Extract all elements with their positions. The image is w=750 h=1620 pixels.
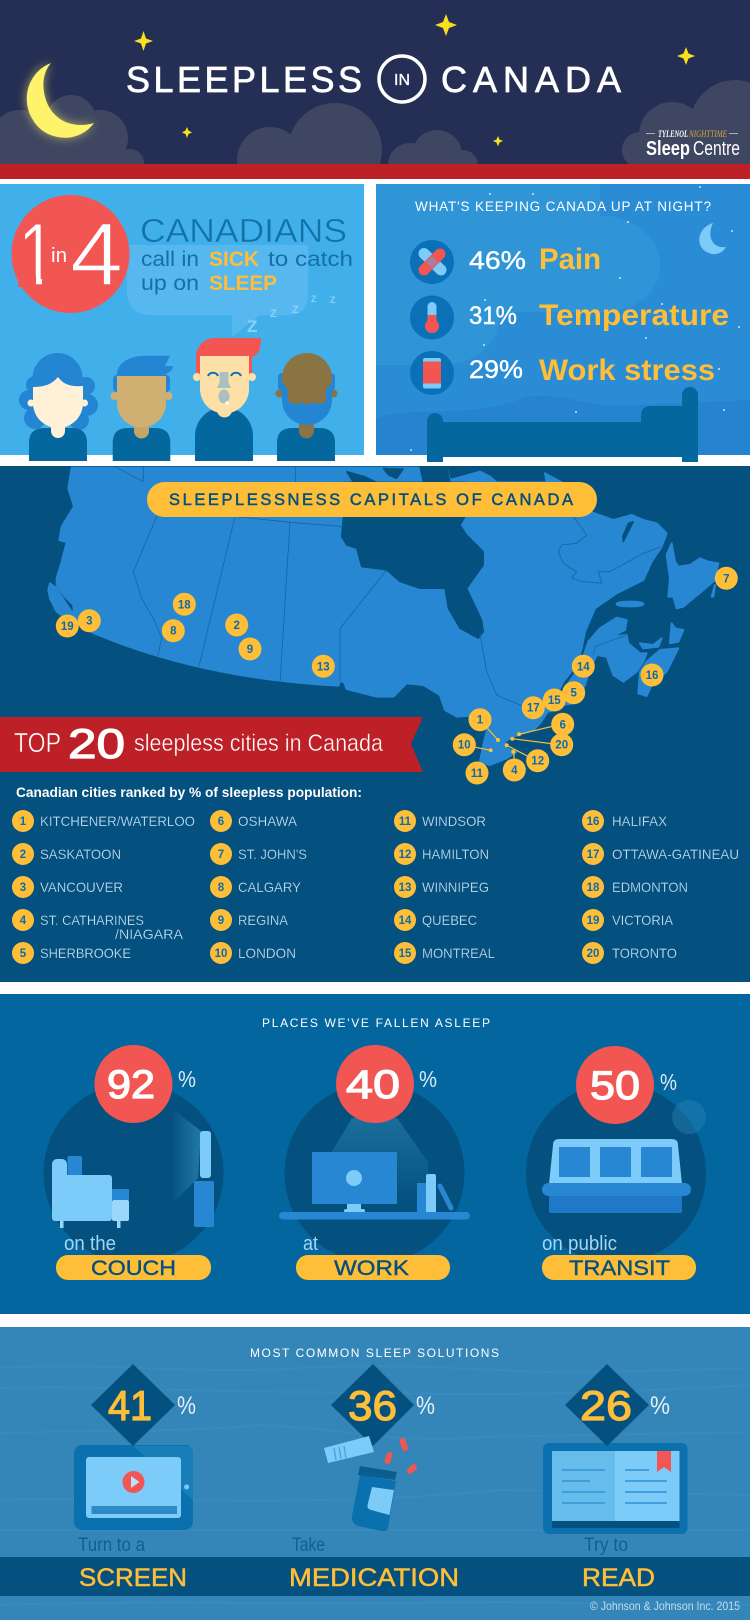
map marker numbers [61, 573, 730, 780]
ranking list numbers: 1 [20, 816, 27, 828]
panel: 1 in 4 Canadians [0, 184, 364, 461]
ranking list names: HALIFAX [612, 813, 668, 829]
map marker numbers: 12 [531, 756, 544, 768]
ranking list numbers: 19 [587, 915, 599, 927]
stat: temperature: Temperature [539, 299, 729, 332]
stat: pain: 46% [469, 247, 526, 275]
title [126, 56, 621, 102]
map marker numbers: 1 [477, 715, 484, 727]
map marker numbers: 2 [233, 620, 240, 632]
ranking list names: WINDSOR [422, 813, 486, 829]
solution: screen [74, 1364, 196, 1556]
ranking list names: /NIAGARA [115, 926, 184, 942]
solutions band [0, 1557, 750, 1596]
solutions band: READ [582, 1564, 655, 1592]
background cloud [376, 184, 660, 365]
map marker numbers: 3 [86, 616, 93, 628]
background hills [376, 396, 750, 455]
stat: couch: % [178, 1066, 196, 1092]
logo: Tylenol Nighttime Sleep Centre: Sleep [646, 138, 690, 160]
ranking list numbers: 10 [215, 948, 227, 960]
ranking list numbers: 20 [587, 948, 599, 960]
person 1 [19, 353, 98, 461]
connector lines [464, 720, 562, 770]
ranking list numbers: 12 [399, 849, 411, 861]
ranking list names: SASKATOON [40, 846, 121, 862]
ranking list numbers: 17 [587, 849, 599, 861]
headline text: to catch [268, 248, 353, 271]
ranking list names: ST. CATHARINES [40, 912, 144, 928]
stat: pain: Pain [539, 243, 601, 276]
headline text: SICK [209, 248, 259, 271]
title: IN [394, 72, 410, 89]
map marker numbers: 7 [723, 573, 730, 585]
ranking list numbers: 11 [399, 816, 412, 828]
ranking list names: SHERBROOKE [40, 945, 131, 961]
snoring Z letters: Z [330, 295, 336, 305]
ranking list numbers: 9 [218, 915, 224, 927]
solution: medication: 36 [348, 1382, 397, 1429]
ranking list numbers: 7 [218, 849, 224, 861]
ribbon: top 20: sleepless cities in Canada [134, 730, 384, 757]
stat: work: at [303, 1233, 318, 1255]
map marker numbers: 15 [548, 695, 561, 707]
stat: work stress [469, 354, 715, 387]
ranking list names: OTTAWA-GATINEAU [612, 846, 739, 862]
stat: transit: TRANSIT [569, 1256, 670, 1280]
ribbon: top 20: TOP [14, 727, 61, 758]
stat: transit: 50 [590, 1064, 640, 1108]
stat: work stress: Work stress [539, 354, 715, 387]
icon: smartphone [410, 351, 454, 395]
stat: transit: on public [542, 1233, 617, 1255]
map marker numbers: 10 [458, 740, 471, 752]
ranking list names: TORONTO [612, 945, 677, 961]
solutions band: MEDICATION [289, 1564, 459, 1592]
ranking list names: REGINA [238, 912, 289, 928]
map marker numbers: 18 [178, 599, 191, 611]
map marker numbers: 13 [317, 661, 330, 673]
ranking list badges [12, 810, 604, 964]
person 2 [110, 356, 173, 461]
ranking list numbers: 18 [587, 882, 600, 894]
ranking list names: CALGARY [238, 879, 302, 895]
logo: Tylenol Nighttime Sleep Centre: TYLENOL [658, 129, 688, 139]
snoring Z letters: Z [270, 308, 277, 320]
logo: Tylenol Nighttime Sleep Centre: NIGHTTIME [688, 129, 727, 139]
ranking list names: HAMILTON [422, 846, 489, 862]
map marker numbers: 16 [646, 670, 658, 682]
ranking list names: EDMONTON [612, 879, 688, 895]
map marker numbers: 5 [570, 688, 577, 700]
title: SLEEPLESS [126, 59, 362, 100]
headline text: call in [141, 248, 199, 271]
ranking list names: QUEBEC [422, 912, 477, 928]
stat: pain [469, 243, 601, 276]
ranking list names: VANCOUVER [40, 879, 123, 895]
heading: WHAT'S KEEPING CANADA UP AT NIGHT? [415, 199, 711, 214]
map marker numbers: 17 [527, 703, 540, 715]
stat: temperature [469, 299, 729, 332]
solution: read [543, 1364, 688, 1556]
stat: work [279, 1045, 470, 1280]
stat: couch: COUCH [91, 1256, 176, 1280]
solution: read: % [650, 1392, 670, 1420]
person 4 [276, 353, 338, 461]
stat: work: % [419, 1066, 437, 1092]
map marker numbers: 9 [247, 644, 253, 656]
ranking list numbers: 2 [20, 849, 26, 861]
ranking list numbers: 6 [218, 816, 224, 828]
ranking list names: LONDON [238, 945, 296, 961]
ranking list names: KITCHENER/WATERLOO [40, 813, 195, 829]
solution: screen: Turn to a [78, 1535, 145, 1556]
stat: transit: % [660, 1069, 677, 1095]
solutions band: SCREEN [79, 1564, 187, 1592]
bed [427, 387, 698, 462]
stat: work: WORK [334, 1256, 410, 1280]
solution: medication [292, 1364, 435, 1556]
ranking heading: Canadian cities ranked by % of sleepless population: [16, 784, 362, 800]
solution: screen: 41 [108, 1382, 152, 1429]
panel: places we've fallen asleep [0, 994, 750, 1314]
headline text: up on [141, 272, 199, 295]
stat: couch: on the [64, 1233, 116, 1255]
ranking list numbers [20, 816, 600, 960]
ranking list names: WINNIPEG [422, 879, 489, 895]
ranking list numbers: 5 [20, 948, 27, 960]
stat: couch [44, 1045, 224, 1280]
ranking list numbers: 15 [399, 948, 412, 960]
solution: medication: % [416, 1392, 435, 1420]
headline text: SLEEP [209, 272, 277, 295]
red circle 1 in 4 [12, 195, 130, 313]
stat: temperature: 31% [469, 302, 517, 330]
ribbon: top 20 [0, 717, 423, 772]
snoring Z letters: Z [247, 317, 257, 336]
heading: PLACES WE'VE FALLEN ASLEEP [262, 1016, 490, 1030]
ranking list numbers: 3 [20, 882, 26, 894]
panel: sleeplessness capitals map [0, 466, 750, 982]
stat: work stress: 29% [469, 356, 523, 384]
solution: screen: % [177, 1392, 196, 1420]
red circle 1 in 4: 1 [18, 204, 56, 304]
red circle 1 in 4: 4 [70, 204, 123, 304]
snoring Z letters: Z [292, 304, 299, 316]
ranking list names: VICTORIA [612, 912, 674, 928]
icon: thermometer [410, 296, 454, 340]
stars [134, 14, 695, 146]
ranking list numbers: 16 [587, 816, 599, 828]
ranking list names: MONTREAL [422, 945, 495, 961]
map marker numbers: 14 [577, 661, 590, 673]
snoring Z letters [247, 294, 336, 336]
clouds [0, 80, 750, 164]
snoring Z letters: Z [311, 294, 317, 304]
map of Canada [48, 467, 718, 765]
ranking list numbers: 13 [399, 882, 411, 894]
headline text: CANADIANS [140, 212, 347, 249]
ranking list names: OSHAWA [238, 813, 298, 829]
stat: work: 40 [346, 1063, 400, 1107]
heading pill [147, 482, 597, 517]
solution: read: 26 [580, 1382, 632, 1429]
red circle 1 in 4: in [51, 245, 67, 267]
ranking list numbers: 14 [399, 915, 412, 927]
map marker numbers: 8 [170, 626, 177, 638]
title: CANADA [441, 59, 621, 100]
map marker numbers: 4 [511, 765, 518, 777]
person 3 snoring [193, 338, 261, 461]
headline text [140, 212, 353, 295]
small moon [699, 223, 726, 254]
header panel [0, 0, 750, 197]
map markers [56, 567, 738, 784]
icon: bandage [410, 240, 454, 284]
solution: read: Try to [584, 1535, 628, 1556]
panel: what's keeping Canada up at night [376, 184, 750, 462]
night sky dots [410, 186, 740, 451]
panel: most common sleep solutions [0, 1327, 750, 1620]
map marker numbers: 6 [559, 719, 566, 731]
map marker numbers: 11 [471, 768, 484, 780]
red stripe [0, 164, 750, 179]
heading: MOST COMMON SLEEP SOLUTIONS [250, 1346, 499, 1360]
solution: medication: Take [292, 1535, 325, 1556]
stat: couch: 92 [107, 1063, 155, 1107]
heading pill: SLEEPLESSNESS CAPITALS OF CANADA [169, 491, 573, 509]
map marker numbers: 20 [555, 740, 568, 752]
ranking list names: ST. JOHN'S [238, 846, 307, 862]
speech bubble [127, 245, 308, 337]
ranking list numbers: 8 [218, 882, 225, 894]
stat: transit [526, 1046, 706, 1280]
logo: Tylenol Nighttime Sleep Centre [646, 129, 740, 160]
ribbon: top 20: 20 [68, 720, 125, 767]
ranking list numbers: 4 [20, 915, 27, 927]
moon [27, 63, 94, 138]
ranking list names [40, 813, 739, 961]
map marker numbers: 19 [61, 621, 74, 633]
